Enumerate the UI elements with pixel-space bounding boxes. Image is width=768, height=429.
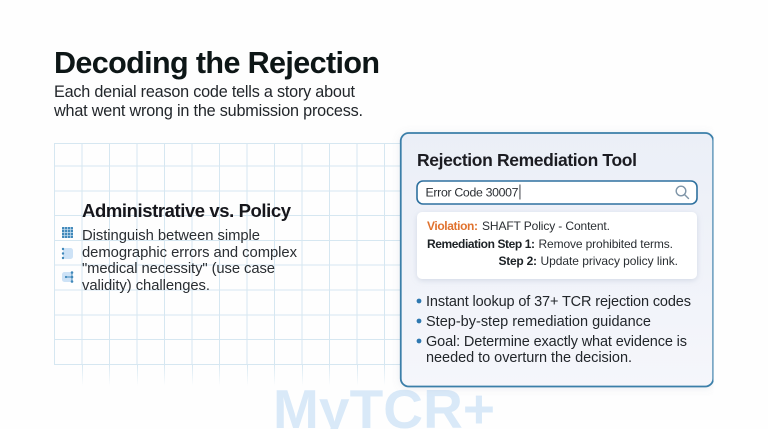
violation line: SHAFT Policy - Content. [482, 219, 610, 233]
remediation step 1: Remove prohibited terms. [538, 237, 673, 251]
heading: administrative vs. policy: Administrative vs. Policy [82, 200, 292, 221]
text block: distinction description [82, 228, 298, 294]
icon: data grid [62, 227, 73, 238]
bullet list: Instant lookup of 37+ TCR rejection codes [426, 294, 691, 310]
icon: magnifier [676, 186, 688, 198]
panel background [401, 133, 713, 386]
remediation step 1 [427, 237, 673, 251]
title: Decoding the Rejection [54, 46, 380, 80]
text block: distinction description: demographic errors and complex [82, 245, 298, 261]
bullet list: Goal: Determine exactly what evidence is [426, 334, 687, 350]
search box [417, 181, 697, 204]
text block: distinction description: Distinguish between simple [82, 228, 260, 244]
subtitle: what went wrong in the submission process. [53, 102, 363, 120]
text block: distinction description: validity) challenges. [82, 278, 210, 294]
violation line [427, 219, 610, 233]
violation line: Violation: [427, 219, 478, 233]
heading: rejection remediation tool: Rejection Remediation Tool [417, 150, 637, 170]
text block: distinction description: "medical necessity" (use case [82, 261, 275, 277]
result card [417, 212, 697, 279]
subtitle: Each denial reason code tells a story about [54, 83, 356, 101]
subtitle [53, 83, 363, 120]
icon: list [62, 248, 73, 259]
panel: administrative vs. policy [62, 200, 298, 294]
remediation step 2: Update privacy policy link. [540, 254, 678, 268]
icon: branching [62, 271, 73, 283]
bullet list: needed to overturn the decision. [426, 350, 632, 366]
remediation step 2: Step 2: [498, 254, 537, 268]
search input text: Error Code 30007 [426, 186, 519, 200]
remediation step 1: Remediation Step 1: [427, 237, 535, 251]
panel: rejection remediation tool [401, 133, 713, 386]
text cursor [518, 184, 521, 200]
bullet list [417, 294, 691, 366]
bullet list: Step-by-step remediation guidance [426, 314, 651, 330]
